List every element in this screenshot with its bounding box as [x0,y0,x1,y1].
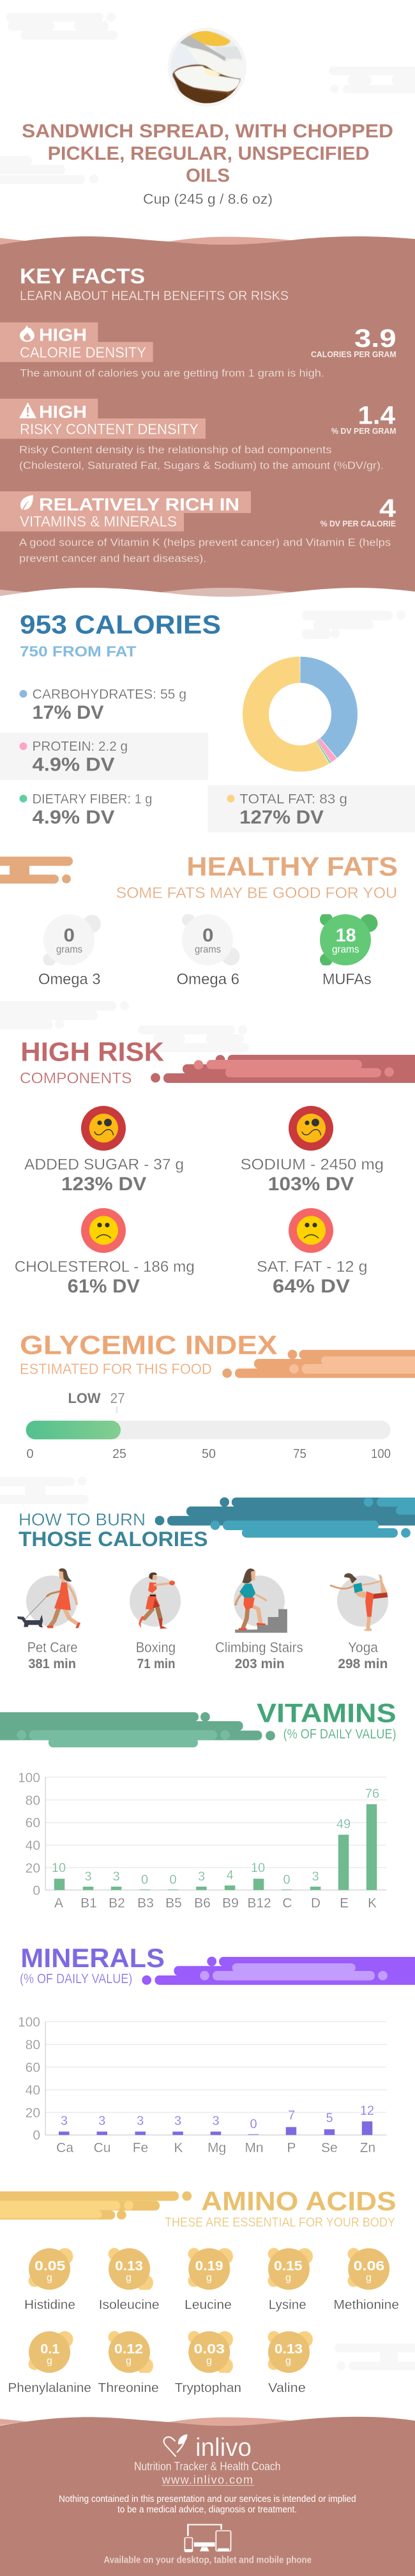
bubble: lysine: g [285,2273,291,2283]
item: saturated fat: 64% DV [273,1276,350,1297]
panel: amino acids [0,2186,399,2395]
activity labels: 381 min [28,1657,76,1671]
bar chart: minerals: Fe [133,2140,148,2155]
fact: calorie density: CALORIE DENSITY [20,344,146,360]
fact: risky content density: (Cholesterol, Saturated Fat, Sugars & Sodium) to the amount (%DV/gr). [19,459,384,471]
bubble: lysine [268,2248,313,2312]
bar chart: minerals: 80 [26,2038,40,2052]
bar chart: minerals: 3 [174,2114,181,2128]
bar chart: minerals: 3 [61,2114,68,2128]
icon: flame [20,325,34,342]
vitamins heading: VITAMINS [257,1698,396,1728]
panel: high risk components [15,1037,415,1297]
bar chart: vitamins: 4 [226,1869,234,1883]
burn heading line 1: HOW TO BURN [19,1510,146,1529]
fact: risky content density: % DV PER GRAM [331,426,396,436]
bubble: valine: g [285,2356,291,2366]
bar chart: vitamins: B12 [247,1896,271,1911]
bar chart: vitamins: 0 [33,1883,40,1898]
activity labels: 71 min [137,1657,175,1671]
high risk heading: HIGH RISK [20,1037,164,1067]
bar chart: vitamins: C [282,1896,292,1911]
bubble: histidine [24,2248,75,2312]
low marker label: LOW [68,1390,101,1406]
bubble: MUFAs: 18 [336,925,356,946]
bar chart: minerals: 100 [18,2015,40,2030]
item: cholesterol [15,1208,195,1297]
bar chart: minerals: 20 [26,2106,40,2120]
bubble: isoleucine: 0.13 [115,2258,143,2273]
bar chart: vitamins: 10 [251,1861,265,1875]
macro: carbohydrates: CARBOHYDRATES: 55 g [33,687,186,702]
fact: calorie density: HIGH [39,325,87,344]
healthy fats subheading: SOME FATS MAY BE GOOD FOR YOU [116,885,397,902]
activity: boxing [130,1572,181,1629]
fact: calorie density: The amount of calories you are getting from 1 gram is high. [20,367,324,379]
bubble: histidine: 0.05 [34,2258,66,2273]
activity labels: 298 min [338,1657,388,1671]
title: PICKLE, REGULAR, UNSPECIFIED [48,143,370,164]
calories from fat: 750 FROM FAT [20,643,137,659]
macro: protein: PROTEIN: 2.2 g [33,739,128,754]
bar chart: vitamins: 20 [26,1861,40,1876]
bar chart: vitamins: 3 [312,1869,319,1883]
bubble: tryptophan: Tryptophan [175,2381,241,2395]
availability note: Available on your desktop, tablet and mobile phone [103,2555,312,2566]
bubble: isoleucine: Isoleucine [99,2298,160,2312]
glycemic heading: GLYCEMIC INDEX [20,1330,277,1360]
serving size: Cup (245 g / 8.6 oz) [143,191,273,207]
bubble: threonine: Threonine [98,2381,159,2395]
bubble: phenylalanine [8,2331,91,2395]
item: saturated fat [257,1208,368,1297]
item: added sugar: ADDED SUGAR - 37 g [24,1156,184,1174]
macro: total fat: 127% DV [239,807,324,828]
bar chart: vitamins: E [340,1896,349,1911]
bar chart: vitamins: B6 [194,1896,211,1911]
logo: inlivo: inlivo [195,2434,252,2462]
fact: risky content density: HIGH [39,402,87,422]
bar chart: vitamins: 3 [112,1869,120,1883]
macro: dietary fiber: DIETARY FIBER: 1 g [33,792,152,806]
item: sodium [240,1106,384,1195]
panel: calories [0,610,415,832]
key facts subheading: LEARN ABOUT HEALTH BENEFITS OR RISKS [20,289,289,303]
bar chart: vitamins: K [368,1896,377,1911]
decoration: red bars [151,1055,415,1083]
bubble: phenylalanine: g [47,2356,52,2366]
bar chart: minerals: 12 [360,2104,374,2118]
bubble: phenylalanine: 0.1 [40,2342,60,2356]
macro: carbohydrates: 17% DV [33,702,103,723]
bar chart: vitamins: A [54,1896,63,1911]
bar chart: minerals: 3 [212,2114,220,2128]
fact: risky content density: 1.4 [358,401,396,429]
bubble: MUFAs [320,913,378,988]
gauge scale: 100 [371,1447,391,1461]
bubble: omega 6: 0 [202,925,213,946]
fact: vitamins and minerals: prevent cancer and heart diseases). [19,553,206,565]
bubble: lysine: Lysine [269,2298,306,2312]
fact: risky content density: Risky Content density is the relationship of bad components [19,443,332,456]
bubble: tryptophan [175,2331,241,2395]
website link: www.inlivo.com [162,2473,253,2486]
icon: warning triangle [19,402,36,418]
bar chart: vitamins: 3 [198,1869,205,1883]
burn heading line 2: THOSE CALORIES [19,1528,208,1551]
vitamins subheading: (% OF DAILY VALUE) [283,1727,396,1742]
activity: pet care [17,1568,80,1628]
bubble: omega 3 [38,914,101,988]
bar chart: vitamins: B5 [165,1896,182,1911]
bar chart: vitamins: B3 [137,1896,154,1911]
bubble: methionine: 0.06 [354,2258,384,2273]
gauge scale: 75 [293,1447,306,1461]
fact: vitamins and minerals: 4 [379,494,396,523]
bubble: MUFAs: MUFAs [322,971,372,988]
item: sodium: SODIUM - 2450 mg [240,1156,384,1174]
activity labels [27,1639,388,1671]
panel: how to burn those calories [17,1498,415,1671]
bubble: omega 6: grams [195,944,221,955]
bubble: methionine [333,2248,399,2312]
decoration: green bars [0,1712,275,1747]
bubble: omega 6: Omega 6 [176,971,239,988]
fact: calorie density: CALORIES PER GRAM [311,349,396,359]
bar chart: vitamins: 80 [26,1793,40,1808]
disclaimer [59,2494,356,2515]
bar chart: minerals: Se [321,2140,338,2155]
disclaimer: to be a medical advice, diagnosis or treatment. [117,2504,297,2515]
bar chart: vitamins: B2 [109,1896,125,1911]
fact: risky content density: RISKY CONTENT DENSITY [20,420,199,437]
low marker label [68,1390,125,1413]
fact: vitamins and minerals: A good source of Vitamin K (helps prevent cancer) and Vitamin E (helps [19,537,391,549]
tagline: Nutrition Tracker & Health Coach [134,2460,281,2473]
bar chart: minerals: Cu [94,2140,110,2155]
bar chart: minerals: Mn [245,2140,264,2155]
food photo [166,27,249,107]
bar chart: vitamins [18,1770,386,1911]
bar chart: minerals: Zn [360,2140,375,2155]
activity labels: Pet Care [27,1639,78,1655]
macro: dietary fiber: 4.9% DV [33,807,114,828]
bar chart: vitamins: 0 [169,1873,177,1887]
icon: sad face [81,1208,126,1253]
calories heading: 953 CALORIES [20,610,221,640]
bar chart: minerals: 3 [137,2114,144,2128]
key facts heading: KEY FACTS [20,264,145,288]
bar chart: vitamins: 0 [283,1873,290,1887]
macro: dietary fiber [19,792,152,828]
bar chart: vitamins: 49 [336,1818,351,1832]
panel: vitamins [0,1698,396,1911]
bar chart: vitamins: D [311,1896,321,1911]
item: cholesterol: 61% DV [68,1276,140,1297]
bar chart: vitamins: 40 [26,1839,40,1853]
bubble: isoleucine [99,2248,160,2312]
activity: climbing stairs [234,1568,287,1633]
bubble: valine [268,2331,313,2395]
logo: inlivo [164,2434,252,2462]
gauge scale [27,1447,391,1461]
low marker label: 27 [110,1390,125,1406]
item: saturated fat: SAT. FAT - 12 g [257,1259,368,1276]
bubble: valine: 0.13 [275,2342,303,2356]
bar chart: vitamins: B9 [222,1896,239,1911]
gauge bar [26,1421,391,1439]
activity: yoga [331,1573,388,1631]
bar chart: vitamins: B1 [80,1896,97,1911]
bar chart: minerals: Mg [207,2140,226,2155]
bubble: threonine [98,2331,159,2395]
high risk subheading: COMPONENTS [20,1070,132,1087]
icon: leaf [20,495,33,510]
bubble: lysine: 0.15 [274,2258,303,2273]
fact: vitamins and minerals: VITAMINS & MINERALS [20,513,177,530]
bar chart: minerals: 5 [326,2112,333,2126]
bar chart: minerals: 60 [26,2060,40,2075]
disclaimer: Nothing contained in this presentation and our services is intended or implied [59,2494,356,2504]
icon: devices [185,2525,231,2552]
panel: footer [0,2417,415,2576]
fact: vitamins and minerals [0,491,396,565]
amino acids subheading: THESE ARE ESSENTIAL FOR YOUR BODY [165,2216,395,2230]
macro: total fat [227,792,347,828]
donut chart [255,670,345,758]
bar chart: vitamins: 76 [365,1787,379,1801]
decoration: purple bars [142,1957,415,1985]
fact: vitamins and minerals: RELATIVELY RICH IN [39,494,239,514]
bubble: isoleucine: g [126,2273,132,2283]
bubble: leucine: 0.19 [195,2258,223,2273]
macro panels [0,733,415,832]
bubble: omega 6 [176,914,240,988]
bubble: histidine: g [47,2273,52,2283]
activity labels: Climbing Stairs [215,1639,303,1655]
item: cholesterol: CHOLESTEROL - 186 mg [15,1259,195,1276]
bubble: leucine [185,2248,233,2312]
activity labels: Boxing [136,1639,176,1655]
bar chart: minerals: 0 [250,2117,257,2131]
glycemic subheading: ESTIMATED FOR THIS FOOD [20,1360,212,1377]
item: added sugar: 123% DV [61,1174,146,1195]
macro: protein: 4.9% DV [33,755,114,776]
bubble: MUFAs: grams [332,944,359,955]
gauge scale: 0 [27,1447,34,1461]
panel: healthy fats [0,852,398,988]
bar chart: minerals: 0 [33,2128,40,2143]
item: added sugar [24,1106,184,1195]
bar chart: vitamins: 10 [52,1861,66,1875]
panel: glycemic index [20,1330,415,1461]
panel: key facts [0,236,415,597]
icon: very sad face [289,1106,333,1151]
decoration: teal bars [155,1498,415,1538]
fact: risky content density [0,399,396,471]
icon: sad face [289,1208,333,1253]
activity labels: Yoga [348,1639,379,1655]
bubble: valine: Valine [268,2381,306,2395]
bubble: omega 3: Omega 3 [38,971,101,988]
bubble: tryptophan: 0.03 [194,2342,225,2356]
bar chart: minerals [18,2015,386,2155]
gauge scale: 25 [112,1447,126,1461]
bubble: leucine: g [206,2273,212,2283]
fact: vitamins and minerals: % DV PER CALORIE [321,519,396,528]
decoration: orange bars [0,857,73,884]
bubble: methionine: Methionine [333,2298,399,2312]
fact: calorie density [0,323,396,379]
amino acids heading: AMINO ACIDS [201,2186,396,2216]
gauge scale: 50 [202,1447,216,1461]
bar chart: minerals: 3 [98,2114,105,2128]
macro: carbohydrates [19,687,186,723]
macro: total fat: TOTAL FAT: 83 g [239,792,347,806]
title [22,121,393,187]
bubble: threonine: 0.12 [114,2342,143,2356]
bubble: threonine: g [126,2356,132,2366]
fact: calorie density: 3.9 [354,325,396,353]
macro: protein [19,739,128,776]
bubble: tryptophan: g [206,2356,212,2366]
minerals heading: MINERALS [20,1943,165,1973]
bar chart: minerals: K [174,2140,183,2155]
panel: minerals [18,1943,415,2155]
bar chart: vitamins: 0 [141,1873,148,1887]
activity labels: 203 min [235,1657,285,1671]
bubble: leucine: Leucine [185,2298,232,2312]
bar chart: vitamins: 60 [26,1816,40,1830]
bubble: histidine: Histidine [24,2298,75,2312]
bar chart: minerals: 40 [26,2083,40,2098]
bar chart: minerals: 7 [288,2109,295,2123]
title: OILS [186,165,230,187]
minerals subheading: (% OF DAILY VALUE) [20,1972,132,1986]
bar chart: vitamins: 100 [18,1770,40,1785]
bubble: methionine: g [366,2273,372,2283]
healthy fats heading: HEALTHY FATS [186,852,398,882]
bubble: phenylalanine: Phenylalanine [8,2381,91,2395]
bar chart: vitamins: 3 [84,1869,92,1883]
bar chart: minerals: Ca [56,2140,73,2155]
icon: very sad face [81,1106,126,1151]
bubble: omega 3: grams [56,944,82,955]
bubble: omega 3: 0 [64,925,75,946]
item: sodium: 103% DV [268,1174,354,1195]
title: SANDWICH SPREAD, WITH CHOPPED [22,121,393,142]
decoration: yellow bars [0,2191,192,2220]
decoration: orange bars [222,1350,415,1378]
bar chart: minerals: P [287,2140,296,2155]
